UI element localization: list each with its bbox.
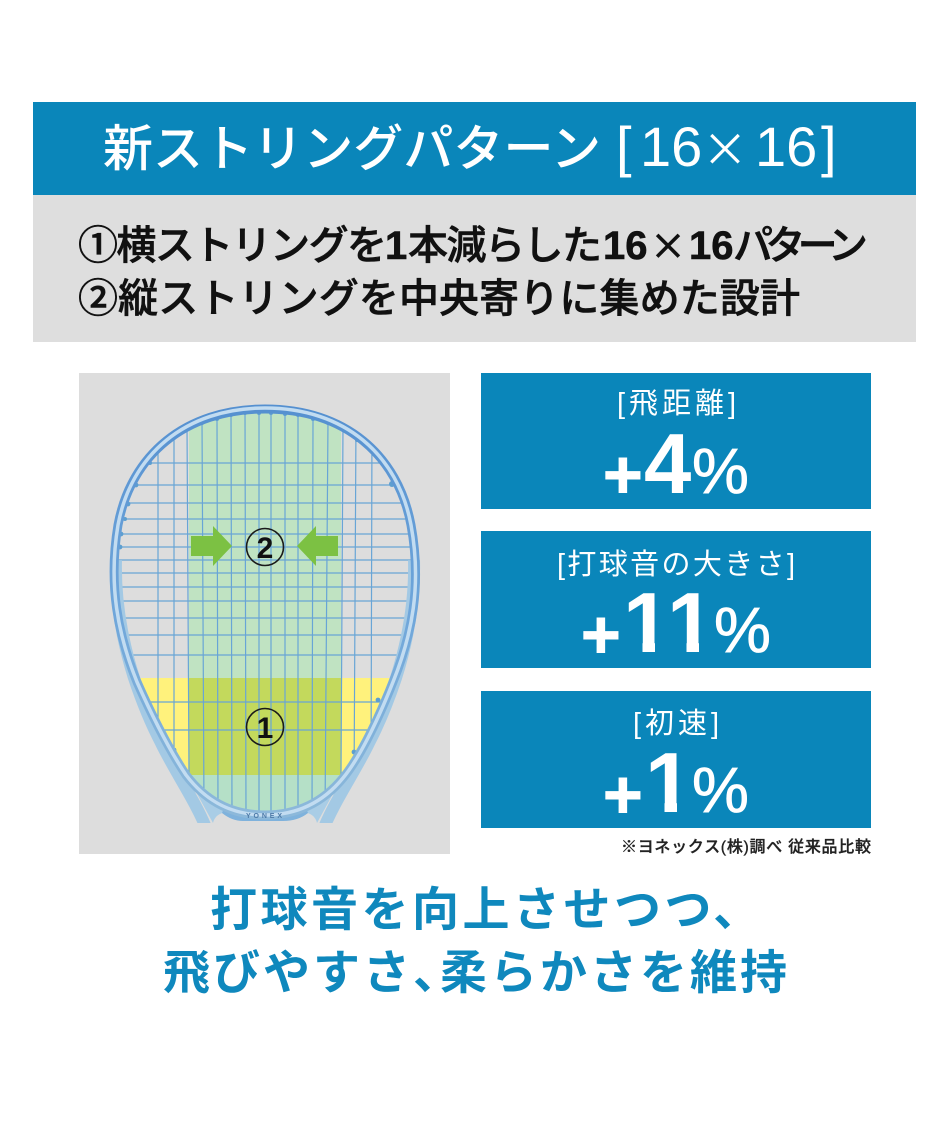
stat: impact sound: %	[714, 594, 771, 666]
stat: distance: %	[692, 435, 749, 507]
title text: ]	[821, 115, 837, 178]
stat: distance	[481, 373, 871, 513]
footnote: ※ヨネックス(株)調べ 従来品比較	[621, 838, 871, 856]
marker 1	[246, 708, 284, 746]
stat: impact sound: +	[581, 597, 621, 673]
stat: initial speed: %	[692, 754, 749, 826]
marker 1: 1	[257, 712, 273, 745]
stat: initial speed	[481, 691, 871, 833]
point 1: ①横ストリングを	[78, 224, 387, 268]
title text: 新ストリングパターン	[103, 121, 601, 177]
string bed highlights	[140, 414, 390, 810]
panel: racket diagram	[79, 373, 450, 854]
racket shaft	[116, 560, 414, 830]
strings	[118, 410, 412, 815]
stat: initial speed: 1	[645, 736, 692, 831]
point 1: 1	[385, 224, 407, 268]
icon: arrow right	[297, 526, 338, 566]
title text: ×	[702, 114, 748, 180]
stat: distance: +	[603, 437, 643, 513]
stat: impact sound: 1	[667, 576, 714, 671]
point 1: ×	[650, 218, 686, 270]
stat: initial speed: [初速]	[633, 707, 719, 740]
stat: distance: 4	[644, 417, 691, 512]
racket frame	[114, 408, 416, 815]
panel: key points	[33, 195, 916, 342]
conclusion text	[163, 883, 790, 999]
title text: [	[616, 115, 632, 178]
point 1: パターン	[733, 224, 868, 268]
point 1: 16	[689, 224, 734, 268]
conclusion text: 飛びやすさ、	[163, 946, 463, 999]
conclusion text: 柔らかさを維持	[440, 946, 790, 999]
title banner	[33, 102, 916, 195]
stat: impact sound: 1	[623, 576, 670, 671]
point 1: 16	[603, 224, 648, 268]
point 2: ②縦ストリングを中央寄りに集めた設計	[78, 277, 800, 321]
stat: impact sound: [打球音の大きさ]	[557, 548, 795, 581]
racket logo: YONEX	[246, 813, 282, 820]
stat: distance: [飛距離]	[617, 387, 736, 420]
marker 2	[246, 528, 284, 566]
stat: initial speed: +	[603, 757, 643, 833]
title text: 16	[755, 115, 817, 178]
marker 2: 2	[257, 532, 273, 565]
stat: impact sound	[481, 531, 871, 673]
point 1: 本減らした	[408, 224, 602, 268]
string grommets	[118, 411, 395, 754]
icon: arrow left	[191, 526, 232, 566]
title text: 16	[640, 115, 702, 178]
conclusion text: 打球音を向上させつつ、	[210, 883, 764, 936]
